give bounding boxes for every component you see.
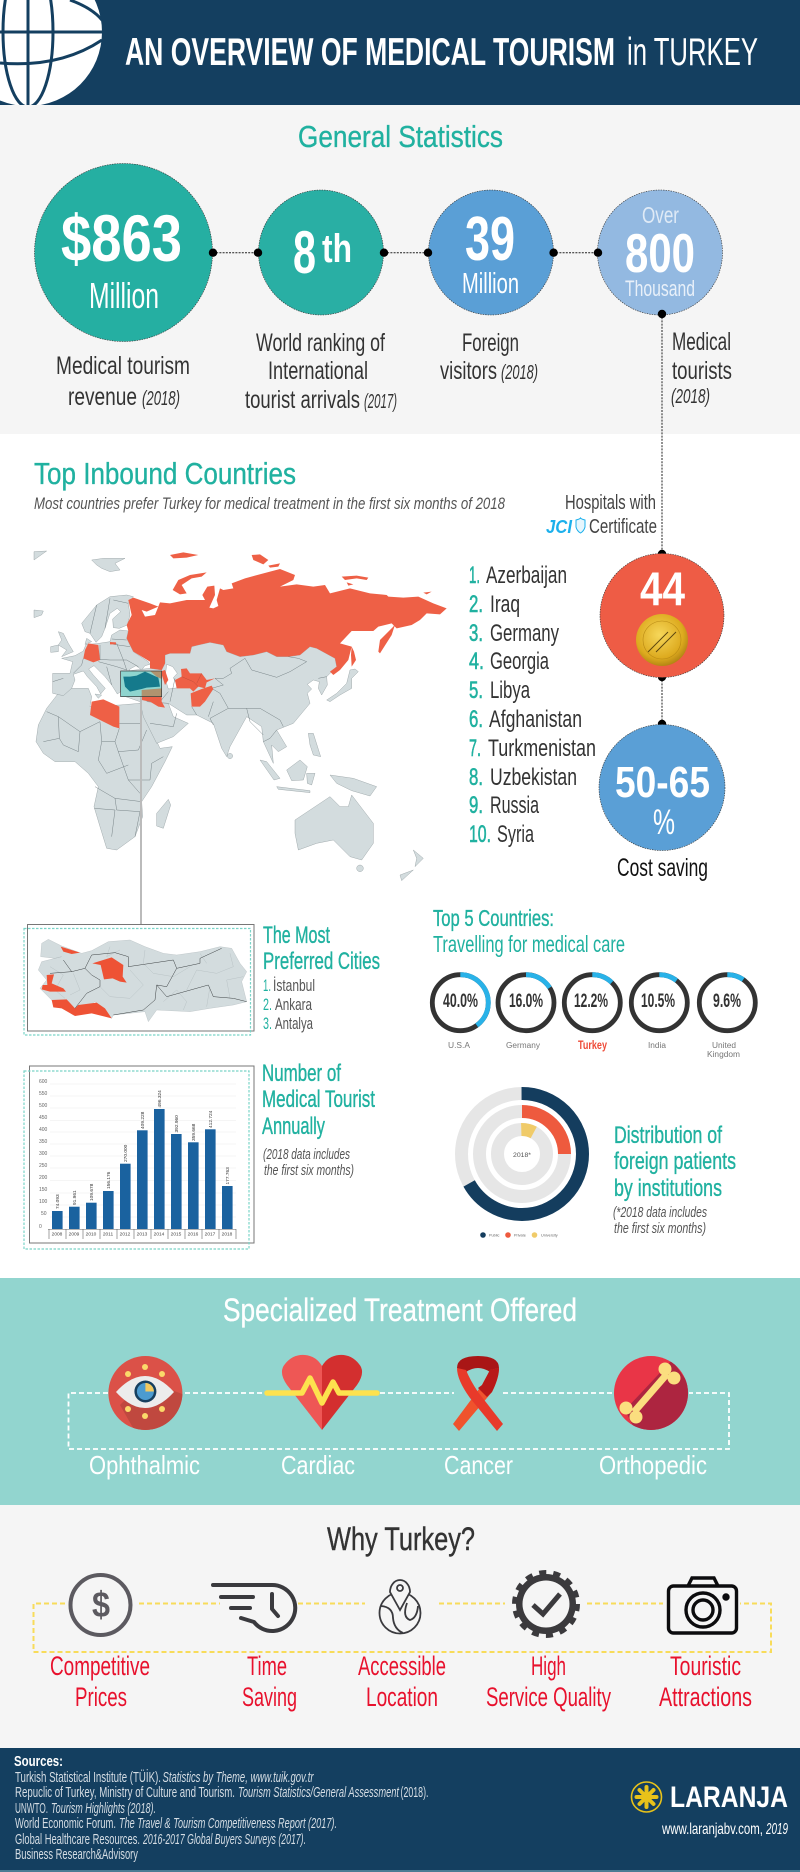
labels: treatments: Orthopedic [599,1450,707,1480]
icon: orthopedic bone [614,1356,688,1430]
bar chart: medical tourists annually: 2013 [137,1232,148,1238]
logo: Laranja [632,1781,788,1838]
sources: Turkish Statistical Institute (TÜİK). [15,1768,161,1786]
bar chart: medical tourists annually: 2012 [120,1232,131,1238]
bar chart: medical tourists annually: 550 [39,1091,48,1097]
sources: Statistics by Theme, www.tuik.gov.tr [162,1770,314,1786]
stat: foreign visitors: (2018) [501,362,538,384]
list: top 10 countries: 3. [469,620,483,647]
icon: JCI shield [576,518,585,533]
stat: revenue: Medical tourism [56,352,190,380]
list: top 10 countries: 7. [469,735,481,762]
bar chart: medical tourists annually: 2016 [188,1232,199,1238]
sources: 2016-2017 Global Buyers Surveys (2017). [142,1832,306,1848]
chart legend: University [541,1234,558,1238]
labels: treatments: Cancer [444,1450,513,1480]
list: top 10 countries: 9. [469,792,483,819]
labels: reasons: Location [366,1682,438,1712]
stat: cost saving [599,724,725,882]
chart legend: Public [489,1234,499,1238]
text: distribution of foreign patients: Distribution of [614,1122,722,1149]
bar chart: medical tourists annually: 156.176 [106,1171,112,1189]
bar chart: medical tourists annually: 100 [39,1199,48,1205]
ring charts: top 5 countries: Kingdom [707,1050,740,1059]
bar chart: medical tourists annually: 2009 [69,1232,80,1238]
stat: medical tourists: Over [642,202,679,228]
list: top 10 countries: Turkmenistan [488,735,596,762]
sources: Sources: [14,1753,63,1770]
sources: Repuclic of Turkey, Ministry of Culture and Tourism. [15,1785,235,1801]
list: top 10 countries: 5. [469,677,483,704]
bar chart: medical tourists annually: 2015 [171,1232,182,1238]
icon: fast clock [213,1585,295,1631]
text: distribution of foreign patients [613,1122,736,1237]
world map [34,551,447,881]
stat: medical tourists: Thousand [625,276,695,301]
stat: revenue: (2018) [142,388,180,410]
text: most preferred cities: Ankara [275,995,312,1014]
sources: Tourism Statistics/General Assessment [238,1785,400,1801]
text: number of medical tourist annually: Annually [262,1113,325,1140]
bar chart: medical tourists annually: 409.228 [140,1111,146,1129]
sources: The Travel & Tourism Competitiveness Report (2017). [119,1816,337,1832]
heading: General Statistics: General Statistics [298,119,503,154]
stat: revenue: Million [89,275,159,316]
bar chart: medical tourists annually: 300 [39,1151,48,1157]
text: distribution of foreign patients: by institutions [614,1175,722,1202]
labels: reasons: Time [247,1651,287,1681]
ring charts: top 5 countries: U.S.A [448,1041,471,1050]
stat: medical tourists: Medical [672,328,731,356]
text: most preferred cities: The Most [263,922,330,949]
labels: reasons: Prices [75,1682,127,1712]
text: distribution of foreign patients: foreign patients [614,1148,736,1175]
bar chart: medical tourists annually: 91.961 [72,1190,78,1205]
stat: medical tourists [598,190,732,408]
sources: UNWTO. [15,1801,48,1817]
labels: reasons [50,1651,752,1712]
highlighted countries [127,552,447,707]
sources: (2018). [400,1785,428,1801]
labels: reasons: Saving [242,1682,297,1712]
sources: Global Healthcare Resources. [15,1832,140,1848]
ring charts: top 5 countries [432,975,755,1059]
ring charts: top 5 countries: 40.0% [443,991,478,1012]
stat: world ranking [245,190,397,414]
list: top 10 countries: Germany [490,620,559,647]
labels: reasons: Competitive [50,1651,150,1681]
stat: medical tourists: (2018) [671,386,710,408]
list: top 10 countries [469,562,596,848]
bar chart: medical tourists annually: 250 [39,1163,48,1169]
chart legend: Private [514,1234,526,1238]
chart legend [480,1232,558,1238]
icon: location globe [380,1580,420,1634]
labels: reasons: High [531,1651,566,1681]
logo: Laranja: www.laranjabv.com, [661,1821,763,1838]
heading: specialized treatment: Specialized Treatment Offered [223,1292,577,1328]
text: most preferred cities: 2. [263,995,272,1014]
bar chart: medical tourists annually: 412.724 [208,1110,214,1128]
stat: world ranking: th [322,227,352,271]
icon: camera [668,1578,736,1633]
donut chart: foreign patients by institutions: 2018* [513,1152,531,1159]
locator line [140,697,142,924]
inset: Turkey locator [121,670,168,708]
bar chart: medical tourists annually: 400 [39,1127,48,1133]
labels: treatments [89,1450,707,1480]
donut chart: foreign patients by institutions [462,1094,582,1238]
icon: dollar coin [70,1575,130,1635]
stat: JCI hospitals [600,554,724,678]
ring charts: top 5 countries: 16.0% [509,991,543,1012]
dashed frame: treatments [68,1393,729,1449]
stat: revenue: $863 [61,201,182,275]
footer [0,1748,800,1872]
text: number of medical tourist annually: (2018 data includes [263,1146,350,1163]
icon: gold seal [636,614,688,666]
connector dots [209,248,666,728]
connectors: stat circles [213,253,662,724]
sources: Tourism Highlights (2018). [51,1801,156,1817]
stat: world ranking: tourist arrivals [245,386,360,414]
label: hospitals with JCI certificate: Hospitals with [565,492,656,514]
text: distribution of foreign patients: the first six months) [614,1220,706,1237]
stat: cost saving: Cost saving [617,854,708,882]
bar chart: medical tourists annually: 500 [39,1103,48,1109]
stat: foreign visitors: Foreign [462,329,519,357]
labels: reasons: Touristic [670,1651,741,1681]
stat: world ranking: International [268,357,368,385]
label: hospitals with JCI certificate [546,492,657,538]
bar chart: medical tourists annually: 2018 [222,1232,233,1238]
heading: Top Inbound Countries: Top Inbound Countries [34,456,296,491]
label: hospitals with JCI certificate: JCI [546,517,573,537]
sources [14,1753,428,1863]
stat: world ranking: (2017) [364,391,397,413]
heading: Top Inbound Countries [34,456,505,513]
ring charts: top 5 countries: Turkey [578,1038,607,1052]
labels: reasons: Service Quality [486,1682,611,1712]
dashed frame: reasons [34,1604,771,1652]
stat: foreign visitors [428,190,554,385]
landmass: Africa and Oceania [36,688,423,881]
list: top 10 countries: Georgia [490,648,549,675]
labels: reasons: Attractions [659,1682,752,1712]
text: most preferred cities [263,922,380,1033]
stat: world ranking: World ranking of [256,329,385,357]
text: number of medical tourist annually: Number of [262,1060,341,1087]
list: top 10 countries: Libya [490,677,530,704]
text: most preferred cities: 3. [263,1014,272,1033]
label: hospitals with JCI certificate: Certificate [589,516,657,538]
ring charts: top 5 countries: 9.6% [713,991,741,1012]
list: top 10 countries: Azerbaijan [486,562,567,589]
heading: why Turkey: Why Turkey? [327,1521,475,1557]
bar chart: medical tourists annually: 2010 [86,1232,97,1238]
bar chart: medical tourists annually: 200 [39,1175,48,1181]
panel: Turkey map [24,924,254,1035]
icon: cardiac heart [267,1355,377,1430]
text: most preferred cities: İstanbul [273,976,315,995]
bar chart: medical tourists annually: 150 [39,1187,48,1193]
list: top 10 countries: Iraq [490,591,520,618]
ring charts: top 5 countries: 12.2% [574,991,608,1012]
ring charts: top 5 countries: 10.5% [641,991,675,1012]
stat: JCI hospitals: 44 [640,562,685,615]
text: most preferred cities: Preferred Cities [263,948,380,975]
bar chart: medical tourists annually: 50 [41,1211,47,1217]
text: number of medical tourist annually: Medical Tourist [262,1086,375,1113]
text: number of medical tourist annually [262,1060,375,1179]
icon: ophthalmic eye [108,1356,182,1430]
text: distribution of foreign patients: (*2018 data includes [613,1204,707,1221]
bar chart: medical tourists annually: 2014 [154,1232,165,1238]
stat: revenue [34,164,212,411]
heading: Top Inbound Countries: Most countries prefer Turkey for medical treatment in the first six months of 2018 [34,494,505,513]
bar chart: medical tourists annually: 359.668 [191,1123,197,1141]
bar chart: medical tourists annually: 350 [39,1139,48,1145]
labels: treatments: Ophthalmic [89,1450,200,1480]
bar chart: medical tourists annually: 177.763 [225,1167,231,1184]
heading: top 5 countries: Travelling for medical care [433,931,625,957]
text: most preferred cities: Antalya [275,1014,313,1033]
bar chart: medical tourists annually: 600 [39,1079,48,1085]
stat: revenue: revenue [68,383,137,411]
text: most preferred cities: 1. [263,976,271,995]
labels: treatments: Cardiac [281,1450,355,1480]
bar chart: medical tourists annually: 392.960 [174,1115,180,1132]
bar chart: medical tourists annually: 450 [39,1115,48,1121]
bar chart: medical tourists annually [24,1066,254,1249]
stat: cost saving: 50-65 [615,758,710,807]
heading: top 5 countries: Top 5 Countries: [433,905,554,931]
sources: World Economic Forum. [15,1816,116,1832]
list: top 10 countries: Afghanistan [489,706,582,733]
text: number of medical tourist annually: the first six months) [264,1162,354,1179]
icon: quality badge [514,1572,578,1636]
icon: cancer ribbon [453,1356,503,1431]
ring charts: top 5 countries: India [648,1041,667,1050]
bar chart: medical tourists annually: 270.000 [123,1144,129,1162]
list: top 10 countries: Syria [497,821,534,848]
list: top 10 countries: 1. [469,562,480,589]
labels: reasons: Accessible [358,1651,446,1681]
ring charts: top 5 countries: United [712,1041,736,1050]
list: top 10 countries: Russia [490,792,539,819]
icon: globe [0,0,103,107]
list: top 10 countries: 8. [469,764,483,791]
bar chart: medical tourists annually: 109.678 [89,1183,95,1201]
stat: medical tourists: tourists [672,357,732,385]
bar chart: medical tourists annually: 74.093 [55,1194,61,1209]
landmass: Europe [34,551,150,698]
list: top 10 countries: 6. [469,706,483,733]
icon: dollar coin: $ [92,1584,110,1625]
landmass: Asia [121,552,447,763]
ring charts: top 5 countries: Germany [506,1041,540,1050]
list: top 10 countries: 10. [469,821,491,848]
bar chart: medical tourists annually: 0 [39,1224,42,1230]
stat: foreign visitors: visitors [440,357,497,385]
bar chart: medical tourists annually: 2017 [205,1232,216,1238]
stat: cost saving: % [653,803,675,842]
stat: world ranking: 8 [293,219,316,286]
stat: foreign visitors: Million [462,268,519,300]
list: top 10 countries: 2. [469,591,483,618]
list: top 10 countries: 4. [469,648,484,675]
sources: Business Research&Advisory [15,1847,138,1863]
list: top 10 countries: Uzbekistan [490,764,577,791]
stat: foreign visitors: 39 [465,205,515,274]
bar chart: medical tourists annually: 496.324 [157,1090,163,1108]
header banner [0,0,800,107]
bar chart: medical tourists annually: 2008 [52,1232,63,1238]
heading: top 5 countries [433,905,625,957]
bar chart: medical tourists annually: 2011 [103,1232,113,1238]
stat: medical tourists: 800 [625,222,695,284]
